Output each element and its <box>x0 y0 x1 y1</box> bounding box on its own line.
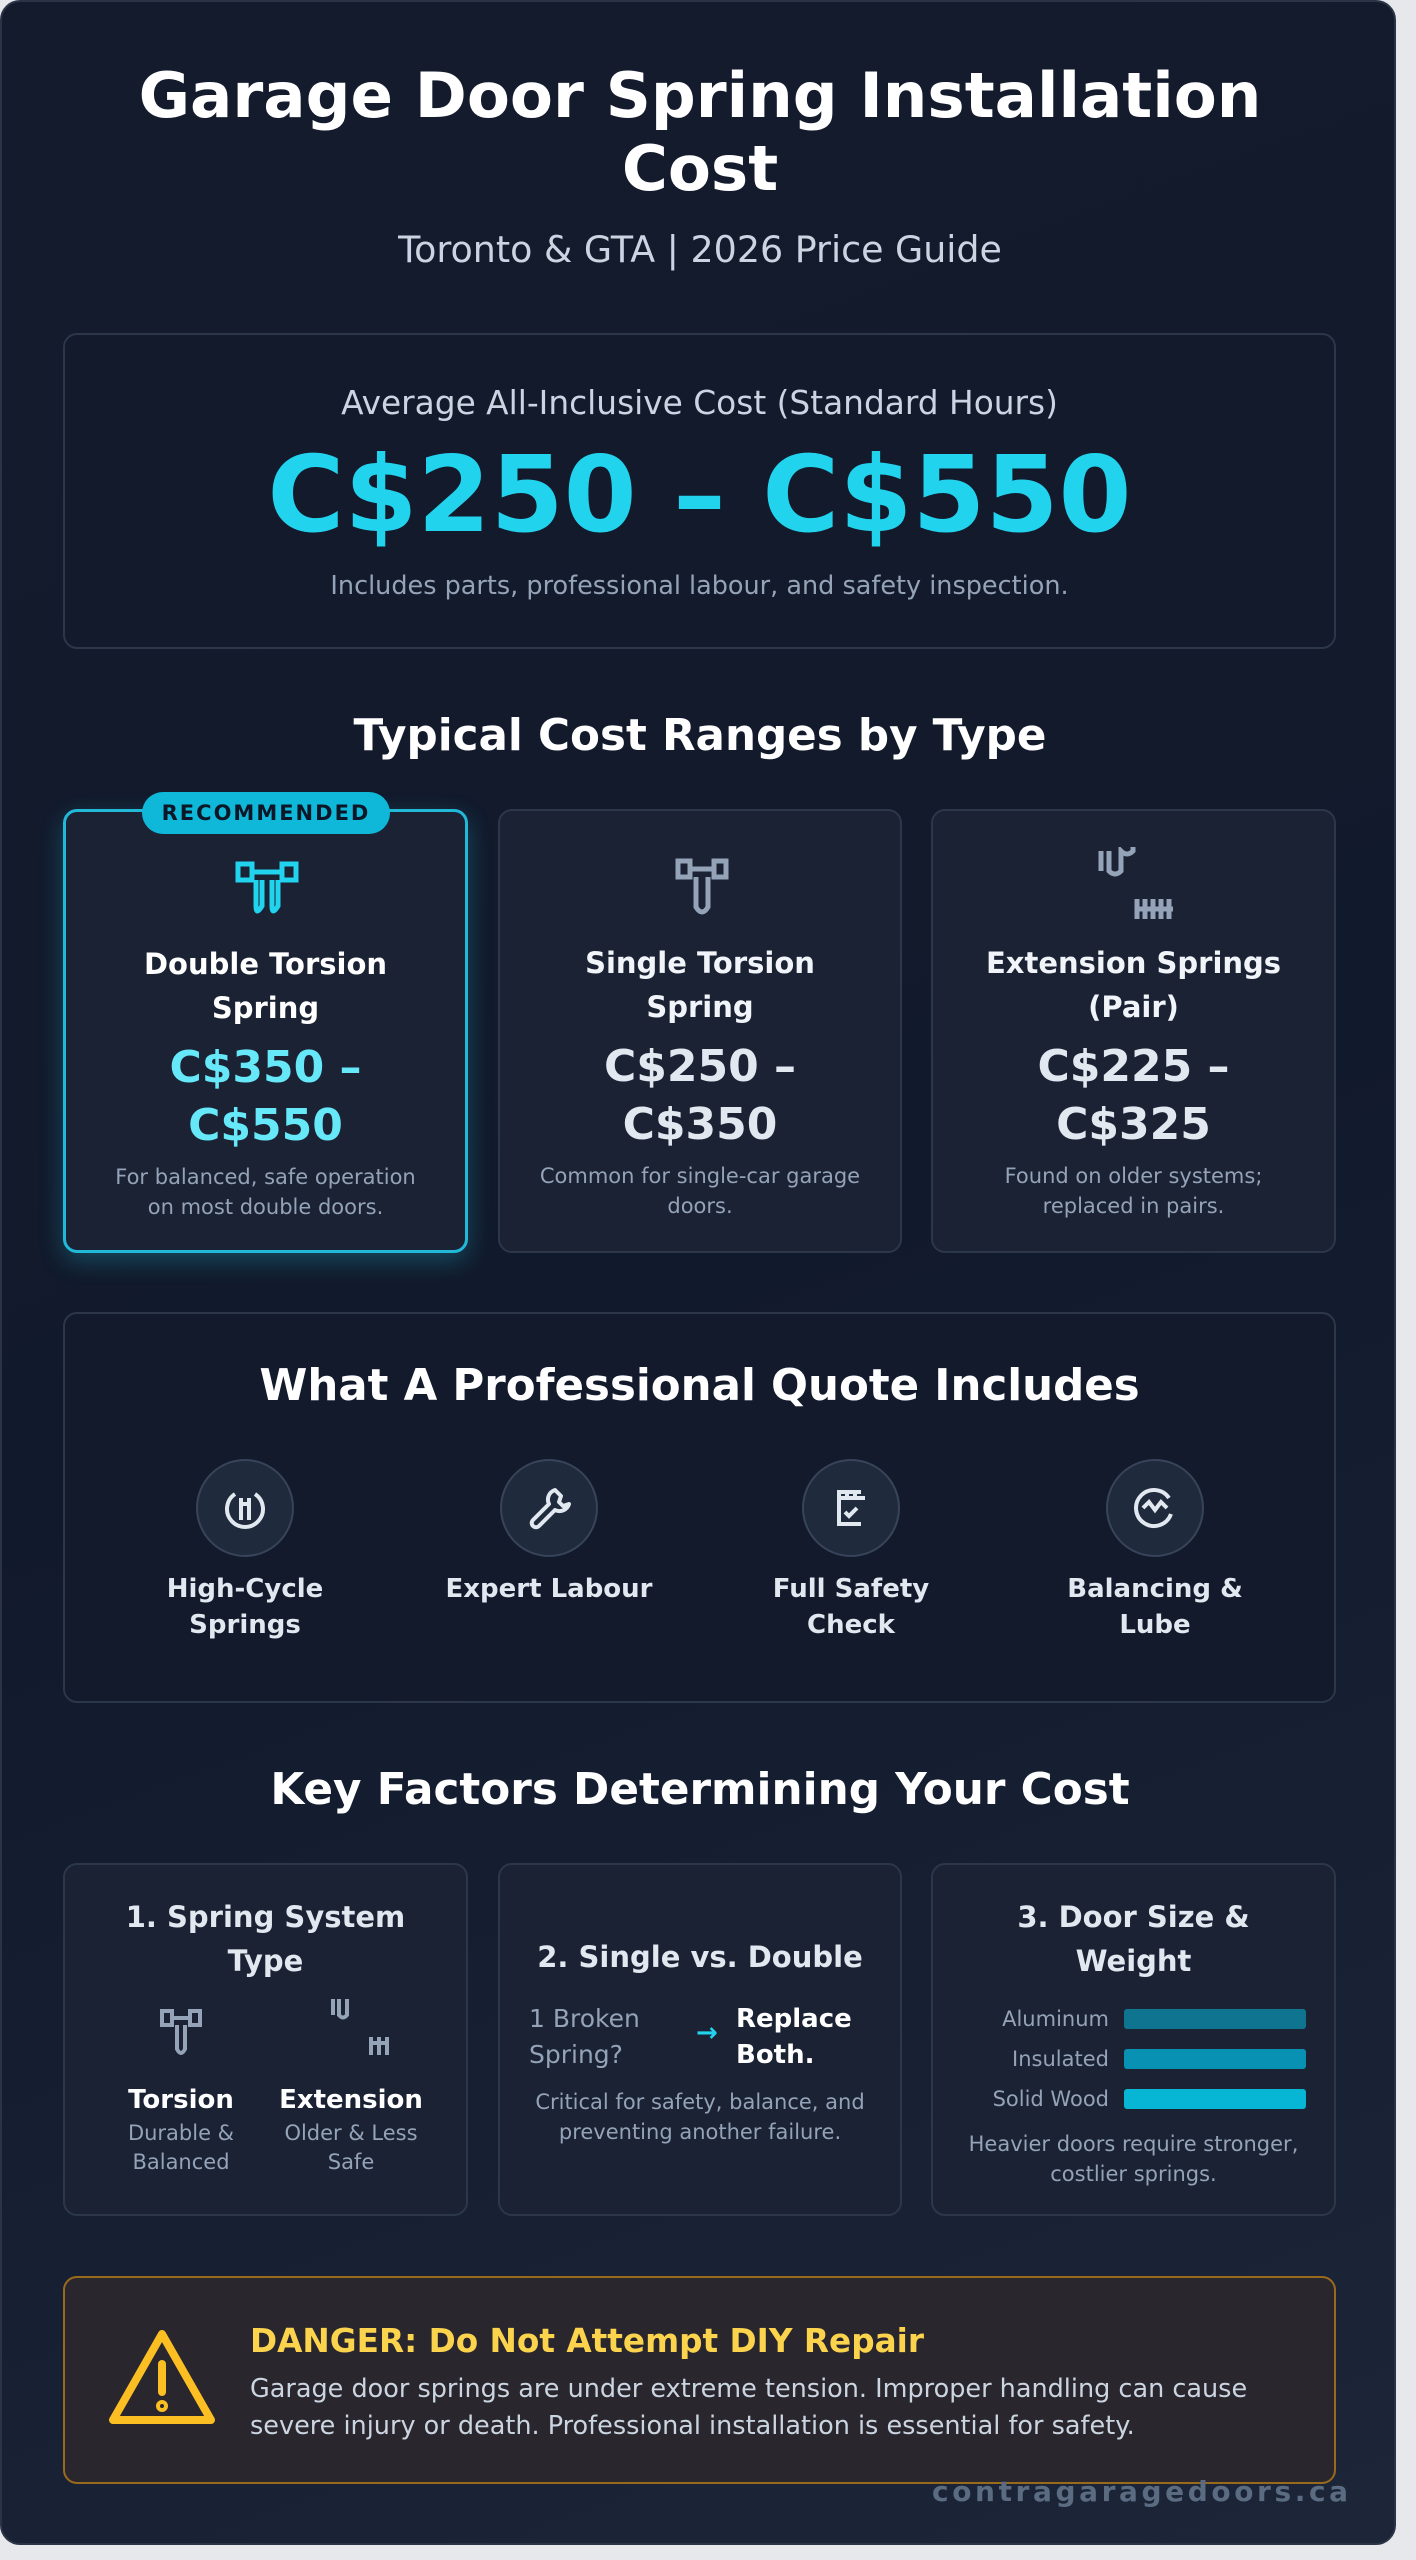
icon: spring circle <box>196 1459 294 1557</box>
item: high-cycle springs <box>167 1459 323 1640</box>
heading: 3. Door Size & <box>1017 1900 1250 1934</box>
price: C$325 <box>1056 1099 1211 1150</box>
description: Critical for safety, balance, and <box>535 2090 865 2114</box>
bar chart: weight: Aluminum <box>1002 2007 1109 2031</box>
bar chart: weight: Solid Wood <box>993 2087 1109 2111</box>
arrow: → <box>696 2018 718 2048</box>
broken spring question <box>529 2004 640 2069</box>
description: Heavier doors require stronger, <box>969 2132 1298 2156</box>
label: Check <box>807 1610 895 1640</box>
replace both <box>736 2004 852 2070</box>
icon: single torsion spring <box>676 858 728 914</box>
icon: extension <box>331 1999 389 2055</box>
label <box>1067 1574 1243 1640</box>
description <box>115 1165 416 1219</box>
icon: torsion <box>160 2009 202 2055</box>
bar chart: weight: Insulated <box>1012 2047 1109 2071</box>
description <box>535 2090 865 2144</box>
subtitle: Toronto & GTA | 2026 Price Guide <box>398 228 1002 271</box>
panel: average cost <box>63 333 1336 649</box>
panel: double torsion <box>63 809 468 1253</box>
danger text <box>250 2374 1247 2441</box>
panel: danger warning <box>63 2276 1336 2484</box>
extension option <box>279 1999 423 2174</box>
heading: Type <box>228 1944 303 1978</box>
label: Springs <box>189 1610 301 1640</box>
item: balancing & lube <box>1067 1459 1243 1640</box>
heading <box>126 1900 405 1978</box>
icon: double torsion spring <box>236 862 298 914</box>
name: Spring <box>646 990 754 1024</box>
name: Spring <box>212 991 319 1025</box>
description: costlier springs. <box>1050 2162 1217 2186</box>
name <box>585 946 815 1024</box>
heading: What A Professional Quote Includes <box>259 1361 1140 1411</box>
price: C$350 – <box>169 1042 362 1093</box>
item: full safety check <box>773 1459 929 1640</box>
price <box>169 1042 362 1151</box>
heading <box>1017 1900 1250 1978</box>
bar chart: weight <box>993 2007 1306 2111</box>
description <box>1005 1164 1262 1218</box>
price: C$225 – <box>1037 1041 1230 1092</box>
title <box>139 59 1261 205</box>
torsion option <box>128 2009 234 2174</box>
heading: 2. Single vs. Double <box>537 1940 863 1974</box>
price <box>604 1041 796 1150</box>
panel: factor 2 single vs double <box>498 1863 902 2216</box>
item: expert labour <box>446 1459 652 1604</box>
label <box>167 1574 323 1640</box>
danger text: severe injury or death. Professional installation is essential for safety. <box>250 2411 1135 2441</box>
danger text: Garage door springs are under extreme tension. Improper handling can cause <box>250 2374 1247 2404</box>
name: Extension Springs <box>986 946 1281 980</box>
panel: professional quote includes <box>63 1312 1336 1703</box>
includes note: Includes parts, professional labour, and safety inspection. <box>330 571 1069 601</box>
torsion option: Balanced <box>132 2150 230 2174</box>
danger heading: DANGER: Do Not Attempt DIY Repair <box>250 2322 924 2360</box>
price: C$250 – <box>604 1041 796 1092</box>
label: Full Safety <box>773 1574 929 1604</box>
name <box>144 947 387 1025</box>
label <box>773 1574 929 1640</box>
panel: single torsion <box>498 809 902 1253</box>
heading: key factors: Key Factors Determining Your Cost <box>270 1764 1130 1815</box>
price <box>1037 1041 1230 1150</box>
name: Single Torsion <box>585 946 815 980</box>
heading: Weight <box>1076 1944 1191 1978</box>
description: For balanced, safe operation <box>115 1165 416 1189</box>
description <box>540 1164 860 1218</box>
icon: wrench <box>500 1459 598 1557</box>
heading: 1. Spring System <box>126 1900 405 1934</box>
description: replaced in pairs. <box>1043 1194 1224 1218</box>
panel: factor 3 door size & weight <box>931 1863 1336 2216</box>
price: C$350 <box>623 1099 777 1150</box>
name <box>986 946 1281 1024</box>
icon: extension springs <box>1098 847 1173 919</box>
name: (Pair) <box>1088 990 1179 1024</box>
panel: factor 1 spring system type <box>63 1863 468 2216</box>
description: on most double doors. <box>148 1195 383 1219</box>
description: preventing another failure. <box>559 2120 841 2144</box>
badge: recommended <box>142 792 390 834</box>
watermark: contragaragedoors.ca <box>932 2475 1352 2508</box>
broken spring question: 1 Broken <box>529 2004 640 2033</box>
panel: extension springs <box>931 809 1336 1253</box>
label: High-Cycle <box>167 1574 323 1604</box>
label: Expert Labour <box>446 1574 652 1604</box>
extension option: Safe <box>328 2150 374 2174</box>
replace both: Both. <box>736 2040 814 2070</box>
extension option: Older & Less <box>284 2121 418 2145</box>
badge: recommended: RECOMMENDED <box>162 801 370 825</box>
icon: checklist <box>802 1459 900 1557</box>
label: Torsion <box>128 2085 234 2115</box>
heading: typical cost ranges: Typical Cost Ranges by Type <box>354 711 1046 761</box>
label: Balancing & <box>1067 1574 1243 1604</box>
replace both: Replace <box>736 2004 852 2034</box>
description: doors. <box>667 1194 733 1218</box>
average label: Average All-Inclusive Cost (Standard Hours) <box>341 384 1058 422</box>
description <box>969 2132 1298 2186</box>
label: Extension <box>279 2085 423 2115</box>
description: Found on older systems; <box>1005 1164 1262 1188</box>
description: Common for single-car garage <box>540 1164 860 1188</box>
price: C$550 <box>188 1100 343 1151</box>
icon: warning triangle <box>109 2330 215 2424</box>
name: Double Torsion <box>144 947 387 981</box>
icon: balance gauge <box>1106 1459 1204 1557</box>
label: Lube <box>1119 1610 1191 1640</box>
big price: C$250 – C$550 <box>267 434 1132 556</box>
broken spring question: Spring? <box>529 2040 623 2069</box>
title: Cost <box>622 132 778 205</box>
title: Garage Door Spring Installation <box>139 59 1261 132</box>
torsion option: Durable & <box>128 2121 234 2145</box>
